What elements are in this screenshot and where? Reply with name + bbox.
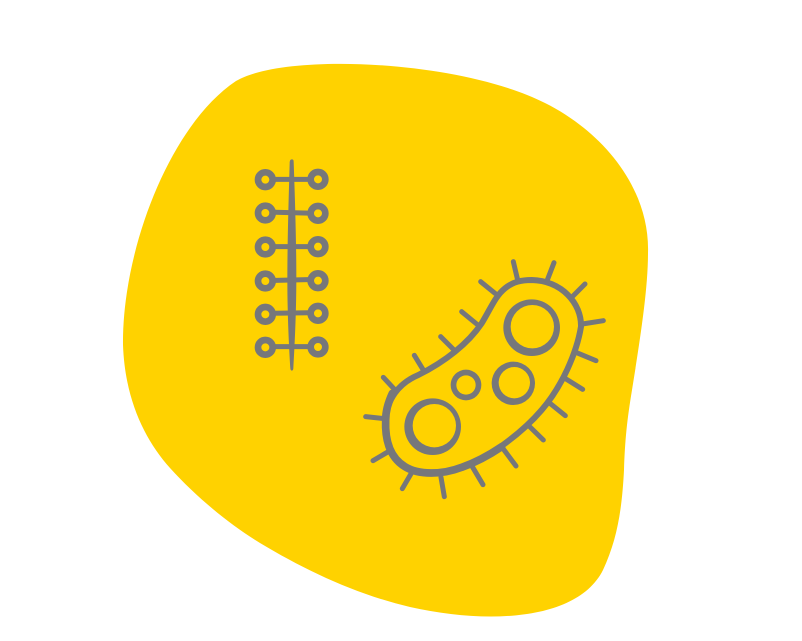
- bacterium thick lower edge: [386, 393, 502, 473]
- bacterium organelles: [404, 299, 560, 455]
- bacterium spines: [366, 262, 603, 497]
- stitch connectors: [265, 179, 318, 347]
- stitch central line: [287, 159, 296, 371]
- yellow blob background: [123, 64, 648, 617]
- icon: suture stitches: [258, 159, 325, 371]
- bacterium body outline: [386, 280, 581, 473]
- icon: bacterium: [366, 262, 603, 497]
- stitch loops: [258, 172, 325, 355]
